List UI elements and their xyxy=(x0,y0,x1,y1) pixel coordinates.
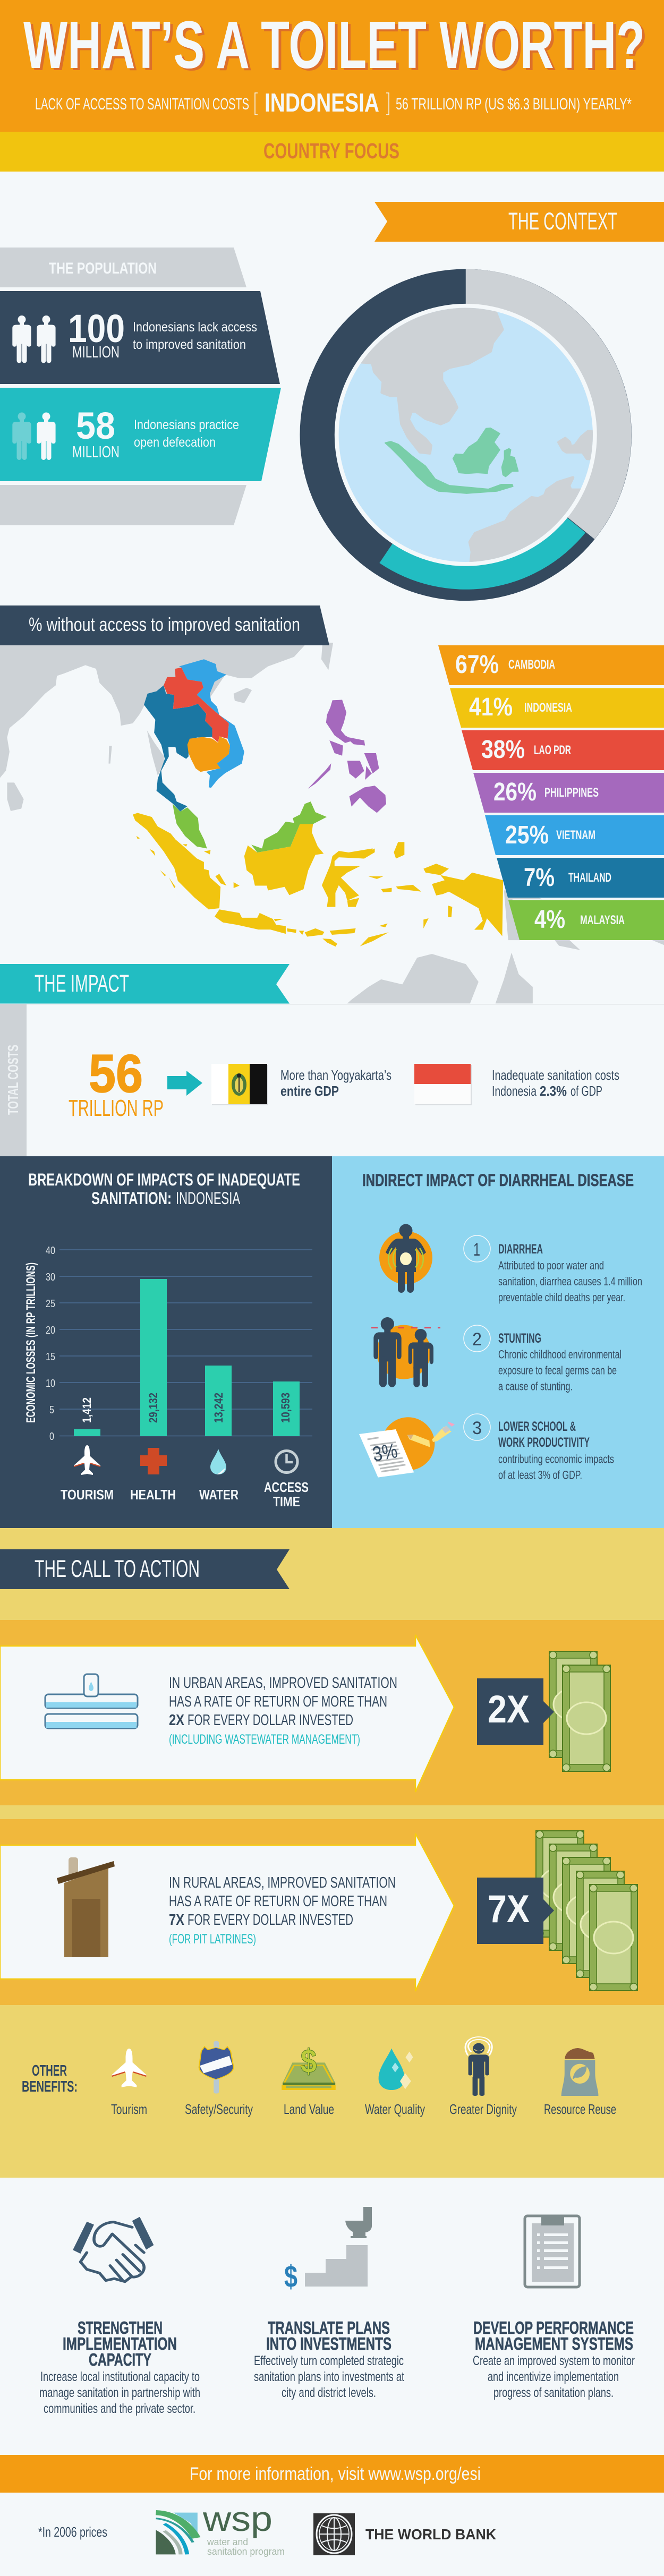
bar chart xyxy=(46,1245,312,1443)
badge: 7x: 7X xyxy=(488,1888,530,1931)
text: urban return: FOR EVERY DOLLAR INVESTED xyxy=(188,1712,353,1729)
icon: two people white xyxy=(12,315,56,363)
56 trillion rp xyxy=(69,1044,164,1121)
icon: test paper and pencil: 3% xyxy=(371,1439,399,1466)
bar: malaysia: MALAYSIA xyxy=(580,913,625,927)
icon: handshake xyxy=(73,2217,154,2282)
56 trillion rp: 56 xyxy=(89,1044,143,1104)
other benefits label: OTHER xyxy=(32,2062,67,2079)
total costs side tab xyxy=(0,1004,27,1156)
bar chart: 40 xyxy=(46,1245,55,1257)
ribbon: the context xyxy=(374,202,664,242)
flag: yogyakarta xyxy=(211,1064,268,1105)
stat: 58 million: open defecation xyxy=(134,435,216,450)
item 3: lower school and work productivity xyxy=(464,1414,614,1482)
category labels xyxy=(61,1479,309,1509)
subtitle: INDONESIA xyxy=(265,89,379,117)
country: lao pdr xyxy=(164,668,229,742)
item 1: diarrhea: Attributed to poor water and xyxy=(498,1259,604,1272)
logo: wsp: water and xyxy=(207,2537,248,2547)
other benefits label xyxy=(22,2062,78,2095)
icon: stack of 2 bills xyxy=(549,1651,610,1771)
flag: indonesia xyxy=(414,1064,472,1105)
text: urban return: HAS A RATE OF RETURN OF MORE THAN xyxy=(169,1693,387,1710)
badge: 2x: 2X xyxy=(488,1688,530,1731)
bar: vietnam: VIETNAM xyxy=(556,828,595,842)
bar chart: 13,242 xyxy=(212,1393,225,1423)
bar chart: 10,593 xyxy=(279,1393,292,1423)
donut chart with globe xyxy=(300,269,632,601)
column: develop performance management systems xyxy=(473,2215,635,2400)
heading: IMPLEMENTATION xyxy=(63,2334,177,2353)
heading: STRENGTHEN xyxy=(78,2318,163,2338)
ribbon: the call to action xyxy=(0,1549,290,1589)
icon: resource sack xyxy=(561,2048,598,2096)
category labels: ACCESS xyxy=(264,1479,309,1495)
grey lower tab xyxy=(0,485,246,525)
bar: indonesia xyxy=(450,688,664,728)
y axis title: ECONOMIC LOSSES (IN RP TRILLIONS) xyxy=(24,1263,38,1423)
text: yogyakarta comparison: More than Yogyakarta’s xyxy=(280,1067,391,1083)
stat: 100 million xyxy=(0,291,280,384)
bar: cambodia: 67% xyxy=(455,651,499,679)
bar: malaysia: 4% xyxy=(534,906,565,934)
text: urban return: 2X xyxy=(169,1712,185,1729)
heading: INTO INVESTMENTS xyxy=(266,2334,391,2353)
country: indonesia xyxy=(133,813,503,946)
chart heading: INDONESIA xyxy=(176,1189,240,1208)
icon: pit latrine xyxy=(57,1857,115,1957)
header banner xyxy=(0,0,664,132)
heading: % without access xyxy=(0,605,329,645)
icon: stack of 7 bills xyxy=(536,1831,637,1991)
logo: wsp xyxy=(156,2499,285,2557)
logo: the world bank xyxy=(313,2513,496,2555)
text: indonesia gdp comparison: Inadequate sanitation costs xyxy=(492,1067,619,1083)
stat: 58 million: 58 xyxy=(76,405,115,447)
bar: vietnam: 25% xyxy=(505,821,549,849)
item 3: lower school and work productivity: WORK PRODUCTIVITY xyxy=(498,1435,590,1450)
bar chart: 0 xyxy=(49,1431,54,1443)
stat: 58 million: MILLION xyxy=(72,442,120,461)
icon: land value xyxy=(282,2042,336,2090)
population heading: THE POPULATION xyxy=(49,260,157,277)
heading xyxy=(63,2318,177,2369)
description xyxy=(473,2353,635,2400)
ribbon: the call to action: THE CALL TO ACTION xyxy=(35,1555,200,1582)
icon: two people one faded xyxy=(12,412,56,460)
bar: thailand: THAILAND xyxy=(568,871,611,885)
benefit labels: Tourism xyxy=(111,2101,147,2117)
country focus band: COUNTRY FOCUS xyxy=(263,139,399,163)
stat: 100 million: MILLION xyxy=(72,343,120,361)
text: indonesia gdp comparison: of GDP xyxy=(571,1083,602,1099)
description: communities and the private sector. xyxy=(44,2401,195,2416)
bar: cambodia xyxy=(438,645,664,685)
item 1: diarrhea: DIARRHEA xyxy=(498,1242,543,1257)
white arrow xyxy=(0,1833,454,1991)
badge: 7x xyxy=(477,1878,554,1944)
category labels: TIME xyxy=(273,1494,300,1509)
band: rural return xyxy=(0,1819,664,2005)
56 trillion rp: TRILLION RP xyxy=(69,1095,164,1121)
panel: the population xyxy=(0,248,281,525)
bar chart: 15 xyxy=(46,1351,55,1363)
bar: thailand: 7% xyxy=(524,864,555,892)
text: urban return: IN URBAN AREAS, IMPROVED SANITATION xyxy=(169,1675,397,1692)
item 3: lower school and work productivity: contributing economic impacts xyxy=(498,1452,614,1466)
description xyxy=(254,2353,404,2400)
ranked country bars xyxy=(438,645,664,940)
icon: water quality drop xyxy=(379,2049,413,2090)
heading: % without access: % without access to improved sanitation xyxy=(29,613,300,635)
bar chart: 10 xyxy=(46,1378,55,1389)
icon: toilet on steps with dollar: $ xyxy=(284,2259,297,2294)
grey land masses xyxy=(0,643,664,1003)
text: rural return: IN RURAL AREAS, IMPROVED SANITATION xyxy=(169,1874,396,1891)
icon: clock xyxy=(276,1451,297,1472)
description xyxy=(39,2369,200,2416)
text: indonesia gdp comparison xyxy=(492,1067,619,1099)
description: city and district levels. xyxy=(282,2385,376,2400)
text: indonesia gdp comparison: 2.3% xyxy=(540,1083,567,1099)
heading xyxy=(473,2318,634,2353)
text: rural return xyxy=(169,1874,396,1947)
bar chart: 20 xyxy=(46,1325,55,1336)
description: sanitation plans into investments at xyxy=(254,2369,404,2384)
logo: the world bank: THE WORLD BANK xyxy=(365,2526,496,2543)
stat: 58 million xyxy=(0,388,281,481)
text: rural return: HAS A RATE OF RETURN OF MORE THAN xyxy=(169,1893,387,1910)
bar: philippines: PHILIPPINES xyxy=(544,786,599,800)
text: urban return xyxy=(169,1675,397,1747)
icon: sick person xyxy=(379,1224,432,1293)
bar: thailand xyxy=(497,858,664,898)
item 3: lower school and work productivity: of at least 3% of GDP. xyxy=(498,1468,582,1482)
benefit labels: Land Value xyxy=(284,2101,334,2117)
bar: philippines xyxy=(473,773,664,813)
item 2: stunting xyxy=(464,1325,622,1393)
category labels: TOURISM xyxy=(61,1487,114,1503)
population heading xyxy=(0,248,246,287)
white arrow xyxy=(0,1635,454,1792)
bar chart: 30 xyxy=(46,1272,55,1283)
footnote: *In 2006 prices xyxy=(38,2524,107,2540)
category labels: WATER xyxy=(199,1487,239,1503)
column: strengthen implementation capacity xyxy=(39,2217,200,2416)
item 1: diarrhea: 1 xyxy=(473,1240,480,1260)
panel: indirect impact of diarrheal disease xyxy=(332,1156,664,1528)
country: cambodia xyxy=(188,736,230,772)
heading xyxy=(266,2318,391,2353)
country: vietnam xyxy=(179,659,244,788)
chart heading xyxy=(28,1170,300,1208)
icon: security badge xyxy=(199,2041,234,2094)
country: philippines xyxy=(308,700,386,813)
total costs side tab: TOTAL COSTS xyxy=(5,1045,21,1115)
bar: cambodia: CAMBODIA xyxy=(508,658,555,672)
icon: plane xyxy=(74,1445,100,1475)
item 2: stunting: Chronic childhood environmental xyxy=(498,1348,622,1361)
text: rural return: FOR EVERY DOLLAR INVESTED xyxy=(188,1912,353,1929)
icon: tourism plane xyxy=(112,2049,147,2087)
item 2: stunting: STUNTING xyxy=(498,1331,541,1346)
icon: toilet on steps with dollar xyxy=(284,2207,372,2294)
ribbon: the impact: THE IMPACT xyxy=(35,970,129,997)
stat: 100 million: to improved sanitation xyxy=(133,337,246,352)
map: south-east asia xyxy=(0,643,664,1003)
bar chart: 1,412 xyxy=(80,1397,93,1423)
bar: lao pdr xyxy=(462,730,664,770)
item 3: lower school and work productivity: LOWER SCHOOL & xyxy=(498,1419,576,1434)
description: and incentivize implementation xyxy=(488,2369,619,2384)
bar: indonesia: INDONESIA xyxy=(524,701,572,715)
bar: vietnam xyxy=(485,815,664,855)
bar chart: 25 xyxy=(46,1298,55,1310)
logo: wsp: sanitation program xyxy=(207,2546,285,2557)
item 2: stunting: a cause of stunting. xyxy=(498,1380,573,1393)
description: progress of sanitation plans. xyxy=(493,2385,614,2400)
stat: 100 million: 100 xyxy=(68,306,125,351)
category labels: HEALTH xyxy=(130,1487,176,1503)
bar: lao pdr: LAO PDR xyxy=(534,743,571,757)
panel: breakdown bar chart xyxy=(0,1156,332,1528)
panel: total costs xyxy=(0,1004,664,1156)
text: rural return: (FOR PIT LATRINES) xyxy=(169,1932,256,1947)
bar: indonesia: 41% xyxy=(469,693,513,721)
item 2: stunting: 2 xyxy=(472,1329,482,1350)
badge: 2x xyxy=(477,1678,554,1745)
icon: test paper and pencil xyxy=(359,1417,455,1478)
text: rural return: 7X xyxy=(169,1912,185,1929)
text: yogyakarta comparison: entire GDP xyxy=(280,1083,339,1099)
icon: clipboard xyxy=(525,2215,580,2287)
benefit labels xyxy=(111,2101,616,2117)
section: the call to action xyxy=(0,1528,664,2178)
arrow xyxy=(167,1071,202,1096)
other benefits xyxy=(22,2037,616,2117)
text: indonesia gdp comparison: Indonesia xyxy=(492,1083,537,1099)
logo: wsp: wsp xyxy=(202,2499,273,2538)
bar chart: 29,132 xyxy=(147,1393,160,1423)
icon: water drop xyxy=(210,1449,226,1474)
band: urban return xyxy=(0,1620,664,1805)
text: urban return: (INCLUDING WASTEWATER MANAGEMENT) xyxy=(169,1732,360,1747)
icon: stunted child and adult xyxy=(371,1317,440,1387)
other benefits label: BENEFITS: xyxy=(22,2078,78,2095)
heading: CAPACITY xyxy=(89,2350,151,2369)
icon: health cross xyxy=(140,1448,167,1474)
stat: 100 million: Indonesians lack access xyxy=(133,320,257,335)
item 2: stunting: exposure to fecal germs can be xyxy=(498,1364,617,1377)
benefit labels: Water Quality xyxy=(365,2101,425,2117)
item 3: lower school and work productivity: 3 xyxy=(472,1418,482,1438)
stat: 58 million: Indonesians practice xyxy=(134,417,239,432)
footer banner xyxy=(0,2455,664,2493)
subtitle xyxy=(35,89,632,117)
benefit labels: Greater Dignity xyxy=(449,2101,517,2117)
benefit labels: Resource Reuse xyxy=(544,2101,616,2117)
country: malaysia xyxy=(173,801,327,852)
country: thailand xyxy=(144,685,212,812)
description: manage sanitation in partnership with xyxy=(39,2385,200,2400)
item 1: diarrhea xyxy=(464,1235,642,1304)
bar chart: 5 xyxy=(49,1404,54,1416)
icon: dignified person xyxy=(465,2037,492,2096)
ribbon: the impact xyxy=(0,964,290,1004)
chart heading: BREAKDOWN OF IMPACTS OF INADEQUATE xyxy=(28,1170,300,1189)
chart heading: SANITATION: xyxy=(91,1189,172,1208)
column: translate plans into investments xyxy=(254,2207,404,2400)
icon: pipes xyxy=(45,1674,138,1728)
icon: land value: $ xyxy=(301,2042,317,2080)
description: Increase local institutional capacity to xyxy=(40,2369,200,2384)
footer banner: For more information, visit www.wsp.org/esi xyxy=(190,2464,481,2484)
description: Effectively turn completed strategic xyxy=(254,2353,404,2368)
bar: lao pdr: 38% xyxy=(481,736,525,764)
heading: TRANSLATE PLANS xyxy=(268,2318,390,2338)
bar: philippines: 26% xyxy=(493,778,537,806)
country focus band xyxy=(0,132,664,172)
bar: malaysia xyxy=(508,900,664,940)
benefit labels: Safety/Security xyxy=(185,2101,253,2117)
text: yogyakarta comparison xyxy=(280,1067,391,1099)
subtitle: LACK OF ACCESS TO SANITATION COSTS xyxy=(35,95,249,113)
